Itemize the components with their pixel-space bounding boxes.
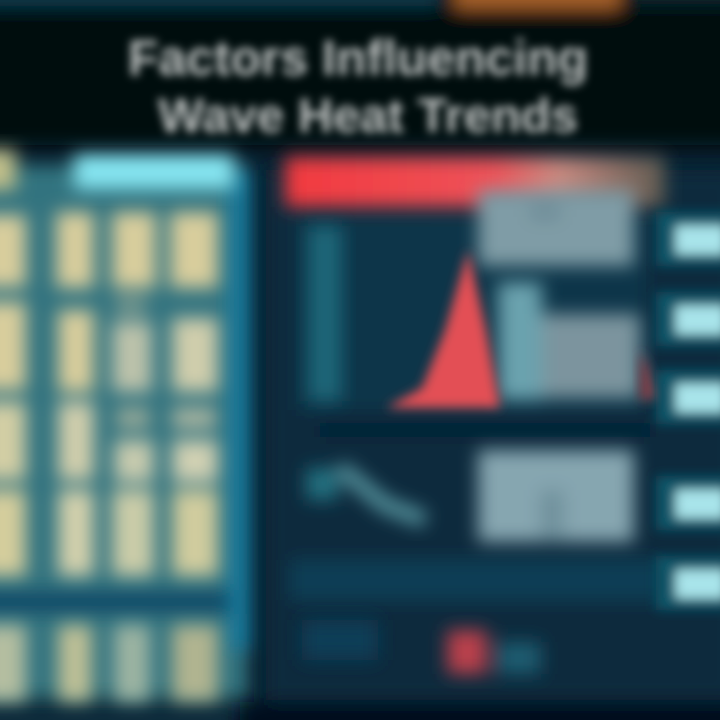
grey block top	[478, 190, 634, 266]
grey block lower	[478, 450, 634, 542]
panel frame	[0, 165, 252, 720]
table header	[0, 150, 234, 190]
axis bar	[308, 226, 342, 401]
right panel background	[240, 170, 720, 720]
side labels	[656, 212, 720, 610]
title: Wave Heat Trends	[158, 90, 578, 143]
line chart	[306, 468, 425, 520]
red trailing mark	[640, 350, 665, 400]
red header bar	[285, 157, 665, 207]
panel: right charts	[240, 157, 720, 720]
title	[128, 30, 588, 143]
bottom chart	[302, 620, 541, 674]
title: Factors Influencing	[128, 30, 588, 86]
top band	[0, 0, 720, 145]
grey block middle	[498, 282, 640, 400]
panel: left table	[0, 150, 252, 720]
table cells	[0, 212, 218, 701]
red peak chart	[386, 250, 500, 408]
